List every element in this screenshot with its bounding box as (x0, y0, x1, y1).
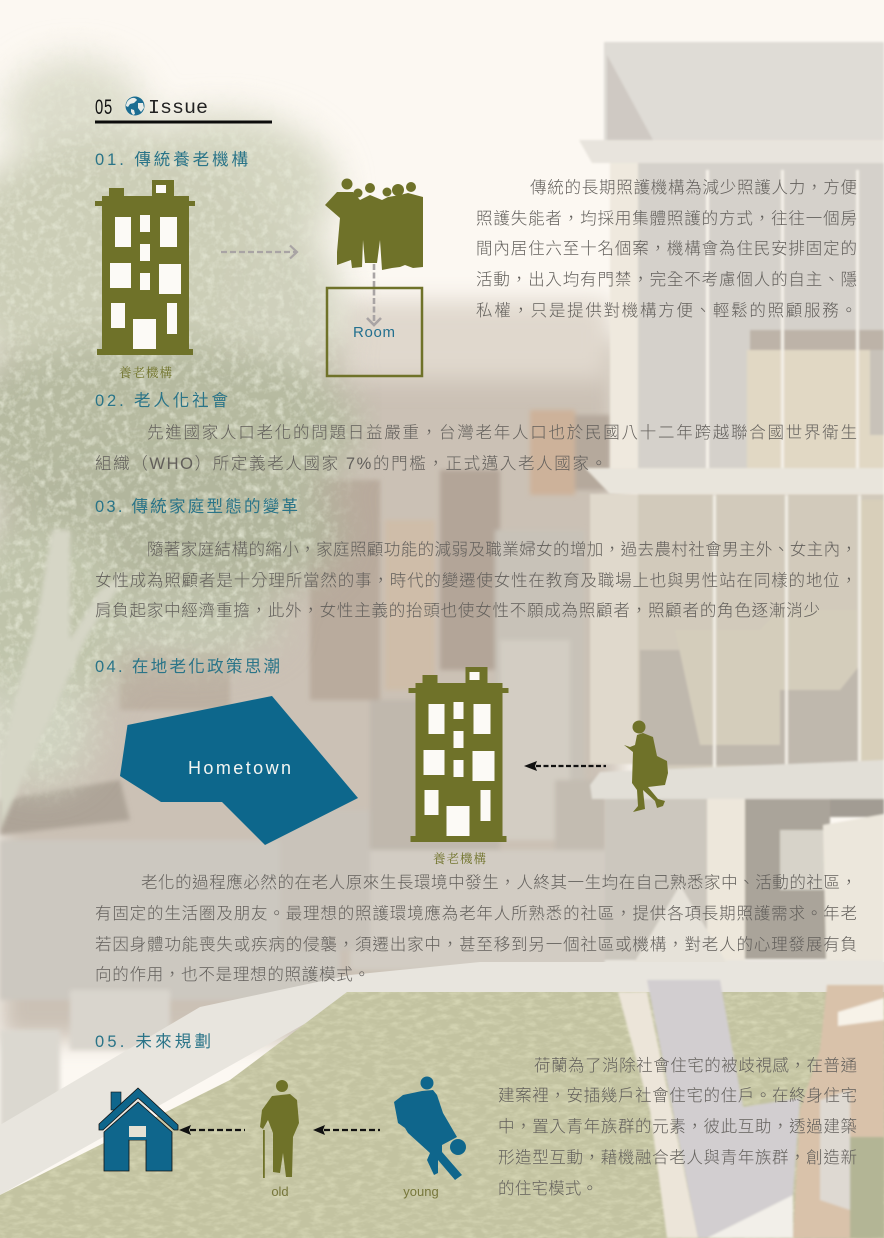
paragraph: changing family structure: 肩負起家中經濟重擔，此外，女性主義的抬頭也使女性不願成為照顧者，照顧者的角色逐漸消少 (95, 601, 820, 620)
section 02 heading: 02. 老人化社會 (95, 391, 228, 410)
parapet wall (0, 962, 884, 1195)
paragraph: future planning: 中，置入青年族群的元素，彼此互助，透過建築 (498, 1117, 857, 1136)
icon: group of residents (325, 178, 423, 270)
paragraph: traditional care institutions: 間內居住六至十名個案，機構會為住民安排固定的 (476, 239, 857, 258)
arrow: woman to building (524, 761, 606, 771)
paragraph: traditional care institutions: 活動，出入均有門禁，完全不考慮個人的自主、隱 (476, 270, 857, 289)
grass roof (0, 992, 884, 1238)
icon: nursing home building 2 (408, 667, 508, 842)
paragraph: ageing in place: 老化的過程應必然的在老人原來生長環境中發生，人終其一生均在自己熟悉家中、活動的社區， (141, 872, 857, 892)
icon: elderly person with cane (260, 1080, 299, 1178)
paragraph: traditional care institutions: 傳統的長期照護機構為減少照護人力，方便 (530, 178, 857, 197)
arrow: old to house (179, 1125, 245, 1135)
building caption: 養老機構 (119, 363, 172, 381)
city skyline haze (0, 300, 620, 1140)
tree canopy (0, 60, 360, 785)
paragraph: changing family structure: 隨著家庭結構的縮小，家庭照顧功能的減弱及職業婦女的增加，過去農村社會男主外、女主內， (147, 540, 857, 559)
section number: 05 (95, 94, 113, 119)
icon: house (99, 1088, 178, 1171)
paragraph: future planning (498, 1055, 857, 1198)
section 04 heading: 04. 在地老化政策思潮 (95, 657, 280, 676)
paragraph: future planning: 建案裡，安插幾戶社會住宅的住戶。在終身住宅 (498, 1086, 857, 1105)
paragraph: ageing society: 先進國家人口老化的問題日益嚴重，台灣老年人口也於民國八十二年跨越聯合國世界衛生 (147, 423, 857, 442)
icon: walking woman (624, 720, 668, 812)
building upper level (579, 42, 884, 494)
paragraph: future planning: 荷蘭為了消除社會住宅的被歧視感，在普通 (534, 1055, 857, 1075)
paragraph: ageing in place: 向的作用，也不是理想的照護模式。 (95, 965, 370, 984)
young label: young (403, 1184, 439, 1199)
paragraph: traditional care institutions: 私權，只是提供對機構方便、輕鬆的照顧服務。 (476, 301, 857, 320)
header rule (95, 120, 272, 124)
paragraph: ageing in place (95, 872, 857, 984)
chair (618, 980, 884, 1238)
icon: nursing home building (95, 180, 195, 355)
room box (327, 288, 422, 376)
building caption 2: 養老機構 (433, 849, 486, 867)
paragraph: ageing in place: 有固定的生活圈及朋友。最理想的照護環境應為老年人所熟悉的社區，提供各項長期照護需求。年老 (95, 903, 857, 923)
hometown region (120, 696, 358, 845)
arrow: building to residents (221, 246, 297, 258)
hometown label: Hometown (188, 758, 291, 778)
arrow: young to old (313, 1125, 380, 1135)
paragraph: changing family structure: 女性成為照顧者是十分理所當然的事，時代的變遷使女性在教育及職場上也與男性站在同樣的地位， (95, 571, 857, 590)
section 01 heading: 01. 傳統養老機構 (95, 150, 248, 169)
section 03 heading: 03. 傳統家庭型態的變革 (95, 497, 298, 516)
paragraph: future planning: 形造型互動，藉機融合老人與青年族群，創造新 (498, 1148, 857, 1167)
paragraph: ageing in place: 若因身體功能喪失或疾病的侵襲，須遷出家中，甚至移到另一個社區或機構，對老人的心理發展有負 (95, 935, 857, 954)
paragraph: future planning: 的住宅模式。 (498, 1179, 598, 1198)
section word: Issue (148, 97, 208, 119)
header: 05 Issue (95, 94, 208, 119)
icon: young basketball player (394, 1076, 466, 1180)
section 05 heading: 05. 未來規劃 (95, 1032, 211, 1051)
paragraph: ageing society: 組織（WHO）所定義老人國家 7%的門檻，正式邁入老人國家。 (95, 454, 607, 473)
paragraph: changing family structure (95, 540, 857, 620)
building lower level (590, 494, 884, 1000)
paragraph: ageing society (95, 423, 857, 473)
room label: Room (353, 324, 395, 341)
icon: globe (126, 96, 144, 116)
arrow: residents into room (367, 264, 381, 325)
tree trunk (0, 530, 130, 830)
paragraph: traditional care institutions (476, 178, 857, 320)
old label: old (271, 1184, 289, 1199)
paragraph: traditional care institutions: 照護失能者，均採用集體照護的方式，往往一個房 (476, 209, 857, 228)
